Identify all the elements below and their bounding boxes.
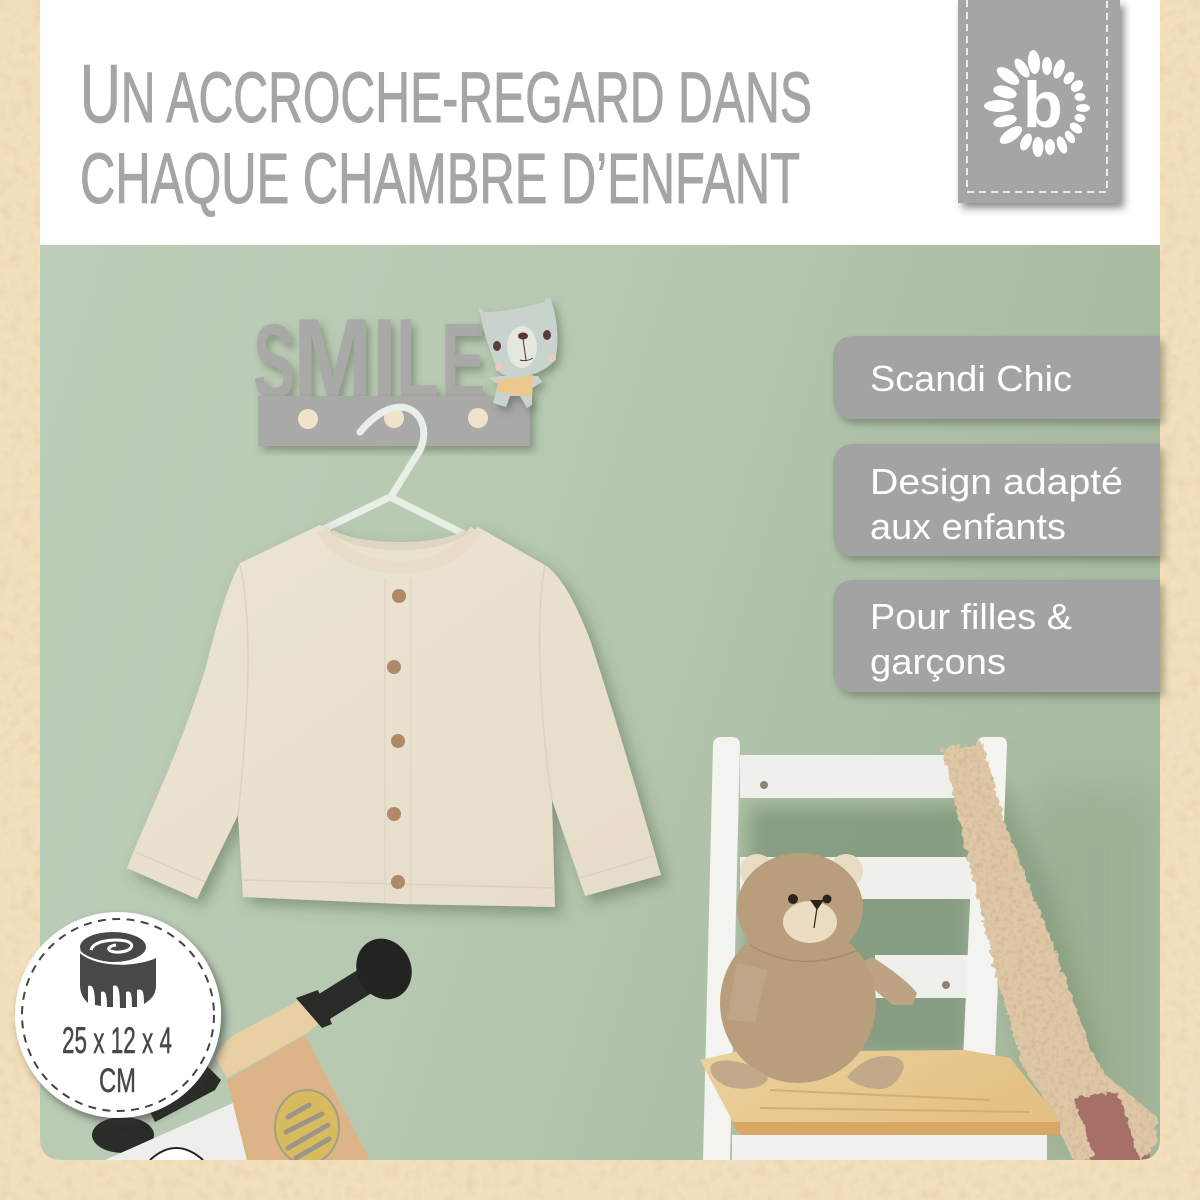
photo panel: nursery wall xyxy=(40,245,1160,1164)
title: UN ACCROCHE-REGARD DANS xyxy=(80,47,812,140)
placket xyxy=(385,578,411,904)
dimensions text: 25 x 12 x 4 xyxy=(62,1020,172,1061)
icon: flower logo: b xyxy=(1023,68,1063,141)
feature pill: Design adapté aux enfants xyxy=(833,444,1160,556)
white bike body xyxy=(105,1103,247,1160)
buttons xyxy=(387,589,406,889)
wooden handle xyxy=(215,1001,318,1078)
panel: header xyxy=(40,0,1160,245)
feature pill: Scandi Chic xyxy=(833,336,1160,419)
hook letters xyxy=(254,319,490,396)
icon: flower logo xyxy=(984,50,1090,157)
plush face xyxy=(788,894,832,928)
chair base rail xyxy=(732,1135,1047,1160)
hook letters: M xyxy=(293,296,372,423)
hook letters: S xyxy=(253,303,295,421)
plush right arm xyxy=(860,957,917,1005)
chair posts xyxy=(703,737,740,1160)
plush left arm xyxy=(727,963,767,1022)
smile coat hook xyxy=(253,294,557,446)
chair xyxy=(700,737,1157,1160)
plush ears xyxy=(740,854,770,882)
cardigan xyxy=(127,525,661,907)
feature pill: Pour filles et garçons xyxy=(833,580,1160,692)
feature pill: Pour filles et garçons: Pour filles & xyxy=(870,596,1072,637)
wooden pegs xyxy=(298,408,488,429)
dimensions badge: CM xyxy=(99,1062,136,1100)
black grip xyxy=(296,938,412,1028)
collar xyxy=(322,529,476,567)
plush muzzle xyxy=(783,901,837,943)
dimensions badge xyxy=(15,912,221,1118)
chair seat xyxy=(700,1050,1060,1135)
yellow oval badge xyxy=(275,1090,339,1164)
title xyxy=(80,47,812,219)
hanger xyxy=(322,407,466,535)
hook letters: L xyxy=(396,296,439,423)
hook letters: I xyxy=(372,294,397,423)
hook letters: E xyxy=(441,302,486,422)
rear wheel and strut xyxy=(92,1064,221,1153)
sleeve seams and hem xyxy=(135,565,654,888)
balance bike xyxy=(92,929,422,1164)
feature pill: Design adapté aux enfants: Design adapté xyxy=(870,461,1123,502)
chair slats xyxy=(740,755,975,998)
title: CHAQUE CHAMBRE D’ENFANT xyxy=(80,140,800,219)
plush body xyxy=(720,940,876,1083)
plush bear xyxy=(710,853,917,1089)
feature pill: Pour filles et garçons: garçons xyxy=(870,641,1006,682)
feature pill: Scandi Chic: Scandi Chic xyxy=(870,358,1072,399)
logo tag xyxy=(958,0,1120,203)
feature pill: Design adapté aux enfants: aux enfants xyxy=(870,506,1066,547)
plush head xyxy=(737,853,863,942)
icon: measuring tape roll xyxy=(78,932,156,1008)
scarf xyxy=(942,743,1157,1160)
wall shadows behind chair xyxy=(748,806,972,1056)
wooden fork xyxy=(227,1035,370,1160)
cartoon bear xyxy=(479,298,557,408)
plush feet xyxy=(710,1060,768,1089)
hook board xyxy=(258,396,530,446)
